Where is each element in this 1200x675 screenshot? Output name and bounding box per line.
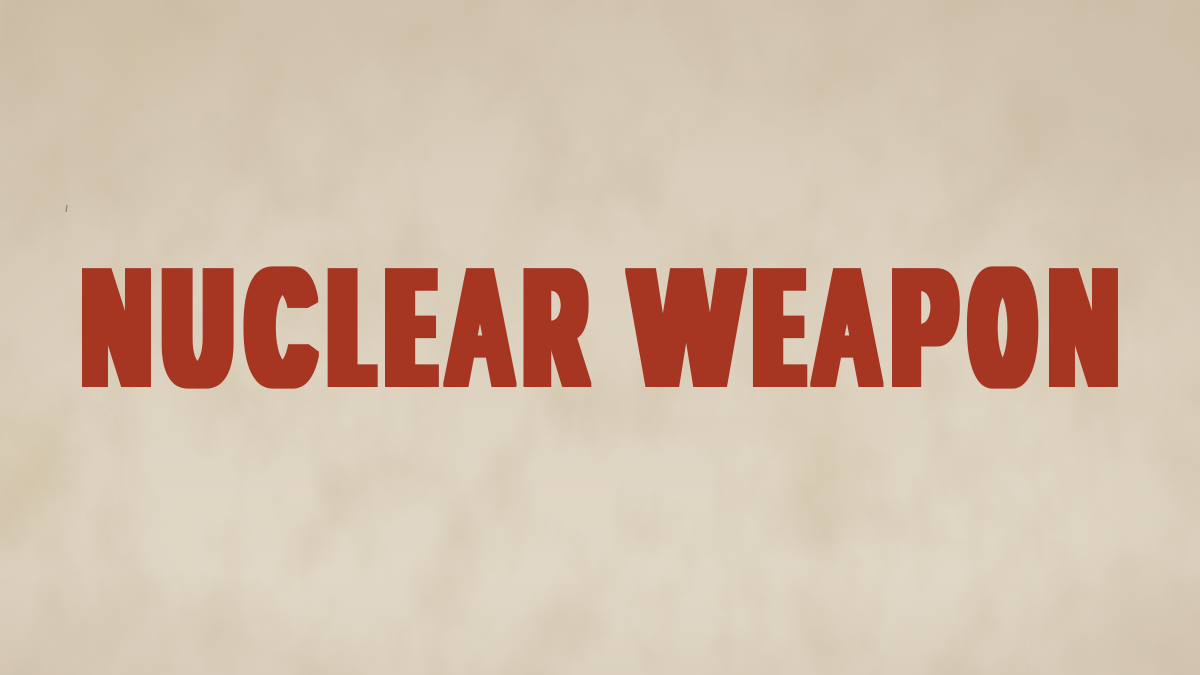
title: E bbox=[392, 235, 430, 421]
title: L bbox=[335, 236, 368, 421]
title: U bbox=[165, 235, 230, 421]
title: N bbox=[83, 233, 150, 421]
title: C bbox=[250, 235, 311, 422]
title: P bbox=[894, 234, 955, 421]
title: R bbox=[526, 234, 585, 421]
title: E bbox=[760, 235, 799, 421]
title: A bbox=[814, 234, 880, 421]
title: A bbox=[447, 234, 513, 421]
title: N bbox=[1050, 233, 1117, 421]
title bbox=[83, 233, 1117, 422]
title: O bbox=[974, 235, 1031, 421]
title: W bbox=[632, 235, 741, 421]
